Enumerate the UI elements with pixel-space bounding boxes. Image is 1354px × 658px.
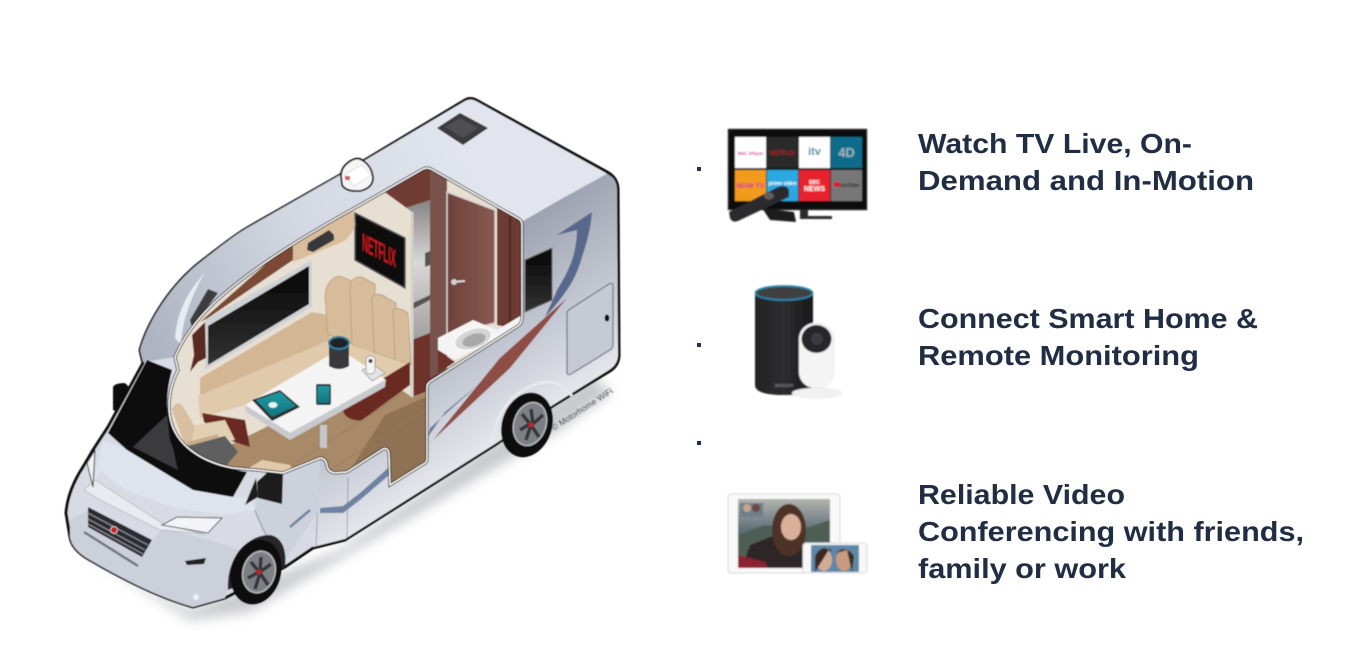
app tiles xyxy=(735,137,862,201)
copyright credit: © Motorhome WiFi xyxy=(550,386,615,433)
app tiles: NETFLIX xyxy=(770,151,795,157)
heading 3 xyxy=(918,479,1304,584)
side band stripe xyxy=(320,468,388,513)
vehicle silhouette xyxy=(66,98,619,607)
overhead brown cabinet xyxy=(200,240,293,322)
phone on table xyxy=(316,384,331,405)
over-cab window xyxy=(190,289,218,328)
front wheel xyxy=(223,534,289,610)
toilet room ceiling xyxy=(384,169,431,208)
table pole xyxy=(320,425,327,448)
smart speaker on table xyxy=(329,337,349,369)
tablet on table xyxy=(252,390,300,421)
side sofa base xyxy=(202,413,250,447)
app tiles: YouTube xyxy=(839,183,860,189)
right wing mirror xyxy=(245,470,283,505)
hood xyxy=(93,440,255,515)
second seat xyxy=(249,460,292,472)
small camera on table xyxy=(362,356,385,381)
tablet xyxy=(728,494,840,573)
infographic canvas xyxy=(64,96,1302,625)
heading 3: Conferencing with friends, xyxy=(918,516,1304,547)
rear wheel arch xyxy=(492,382,572,444)
over-cab highlight xyxy=(175,272,205,345)
toilet room back xyxy=(406,199,431,340)
heading 1: Demand and In-Motion xyxy=(918,165,1254,196)
app tiles: BBC xyxy=(809,180,820,186)
heading 2: Remote Monitoring xyxy=(918,340,1199,371)
heading 3: Reliable Video xyxy=(918,479,1125,510)
fire stick xyxy=(762,208,796,222)
overhead tan cabinet xyxy=(292,210,356,262)
dinette table xyxy=(245,349,386,440)
floor planks xyxy=(292,396,400,470)
rear wheel xyxy=(493,386,561,464)
tv stand xyxy=(800,210,832,219)
left wing mirror xyxy=(113,383,130,412)
floor xyxy=(226,390,426,472)
satellite dome xyxy=(341,158,373,191)
camera lens xyxy=(811,333,823,345)
lower lamp xyxy=(193,594,199,600)
icon: TV with streaming apps xyxy=(728,129,867,222)
bench seat xyxy=(328,337,410,378)
app tiles: NOW TV xyxy=(736,183,765,190)
bench base xyxy=(340,362,410,420)
side sofa seat xyxy=(198,341,330,418)
long side window xyxy=(205,260,312,370)
heading 2 xyxy=(918,303,1258,371)
partition wall xyxy=(380,192,412,396)
partition edge xyxy=(410,212,414,397)
bench back cushions xyxy=(325,276,411,365)
wall television xyxy=(355,213,405,288)
bullet 1 xyxy=(697,167,701,171)
camera base xyxy=(792,388,842,398)
side headlight xyxy=(87,450,95,487)
speaker body xyxy=(755,286,813,395)
main headlight xyxy=(162,517,222,533)
wall television: NETFLIX xyxy=(362,229,396,274)
front bumper xyxy=(70,510,240,607)
cutaway outline xyxy=(169,168,522,485)
heading 3: family or work xyxy=(918,553,1127,584)
cab passenger seat xyxy=(172,403,238,467)
side panel seams xyxy=(316,470,348,546)
bonnet lip xyxy=(84,480,205,534)
remote xyxy=(729,186,789,222)
lower room wall xyxy=(412,333,430,397)
toilet room details xyxy=(413,251,430,309)
side sofa backrest xyxy=(200,312,330,398)
windscreen xyxy=(108,360,247,497)
app tiles: NEWS xyxy=(804,186,825,193)
heading 1 xyxy=(918,128,1254,196)
curtain xyxy=(190,322,206,372)
interior wall base xyxy=(170,180,503,444)
washroom pillar xyxy=(430,165,447,405)
swoosh graphic xyxy=(545,212,592,317)
door crease xyxy=(290,510,310,527)
rear wall strips xyxy=(497,207,522,330)
icon: tablet and phone video call xyxy=(728,494,867,573)
cabinet below sink xyxy=(430,350,456,380)
bullet 3 xyxy=(697,441,701,445)
motorhome cutaway illustration xyxy=(66,98,619,620)
speaker ring xyxy=(756,286,812,300)
rear locker door xyxy=(567,283,613,375)
camera face xyxy=(802,325,832,353)
floor step dark planks xyxy=(352,397,426,482)
sink unit xyxy=(438,315,522,360)
speaker label: amazon xyxy=(775,383,793,389)
camera body xyxy=(799,323,834,388)
red side stripe xyxy=(433,298,567,440)
locker lock xyxy=(605,314,609,322)
front grille xyxy=(84,507,152,566)
app tiles: 4D xyxy=(838,145,855,160)
ground shadow xyxy=(72,375,612,620)
app tiles: prime video xyxy=(768,181,797,187)
app tiles: itv xyxy=(808,146,822,158)
phone faces xyxy=(815,548,854,572)
roof hatch xyxy=(437,113,488,145)
fog lamp xyxy=(185,558,206,565)
heading 2: Connect Smart Home & xyxy=(918,303,1258,334)
app tiles: BBC iPlayer xyxy=(738,151,764,156)
heading 1: Watch TV Live, On- xyxy=(918,128,1192,159)
rear side wall xyxy=(313,174,618,547)
tv frame xyxy=(728,129,867,210)
cab door xyxy=(255,458,320,560)
cutaway white edge xyxy=(169,168,522,485)
dash camera xyxy=(307,230,334,252)
roof and over-cab xyxy=(140,100,606,362)
bullet 2 xyxy=(697,343,701,347)
phone screen xyxy=(811,545,859,572)
phone xyxy=(803,543,867,573)
cutaway interior xyxy=(170,169,521,482)
tablet scene xyxy=(738,503,830,568)
icon: smart speaker and camera xyxy=(755,286,842,398)
washroom door xyxy=(447,192,495,335)
blue side stripe xyxy=(428,383,480,437)
rear side window xyxy=(525,248,552,312)
door edge xyxy=(255,510,272,548)
tablet screen xyxy=(738,499,830,568)
front wheel arch xyxy=(228,535,285,590)
